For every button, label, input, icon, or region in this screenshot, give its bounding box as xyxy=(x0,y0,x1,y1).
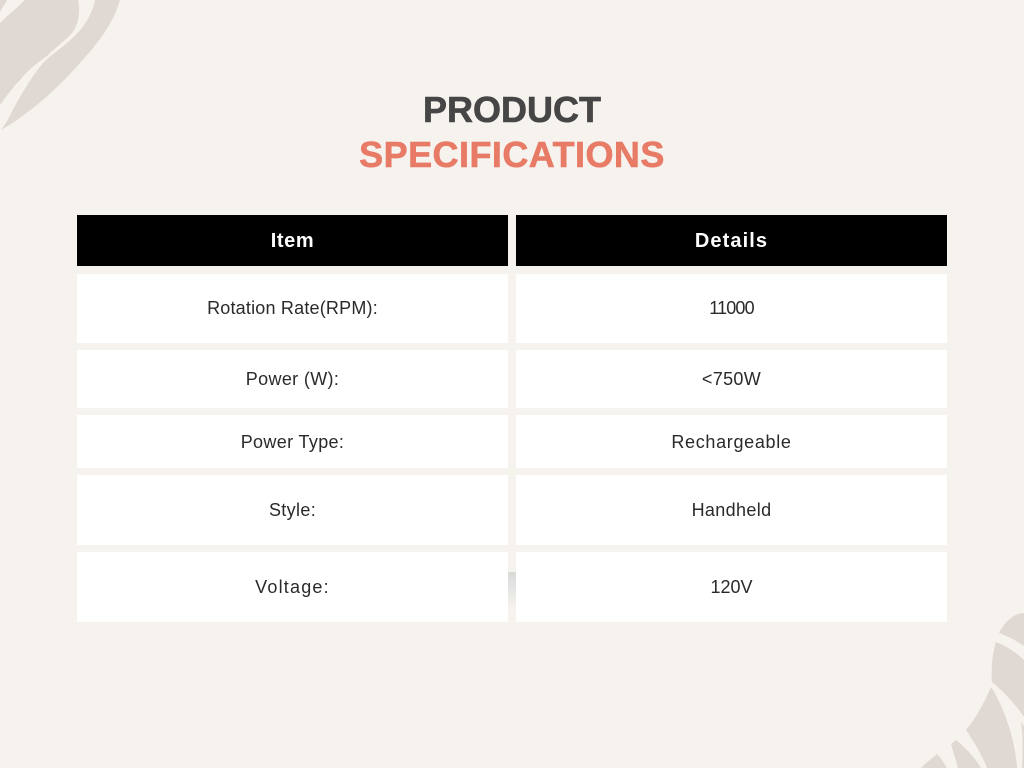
row label: power: Power (W): xyxy=(246,368,339,388)
title xyxy=(359,89,665,175)
row value: power type xyxy=(516,415,947,468)
row label: style xyxy=(77,475,508,545)
row value: style: Handheld xyxy=(692,500,771,520)
header: item: Item xyxy=(271,230,314,252)
row label: rotation rate xyxy=(77,274,508,343)
header: details: Details xyxy=(695,230,768,252)
header: details xyxy=(516,215,947,266)
row label: power type: Power Type: xyxy=(241,432,344,452)
row value: voltage xyxy=(516,552,947,622)
row value: power type: Rechargeable xyxy=(671,432,792,452)
decorative leaf: top left xyxy=(0,0,120,130)
title line: product: PRODUCT xyxy=(423,89,601,130)
row value: style xyxy=(516,475,947,545)
row label: rotation rate: Rotation Rate(RPM): xyxy=(207,298,378,318)
row label: voltage: Voltage: xyxy=(255,576,330,596)
row label: power xyxy=(77,350,508,408)
title line: specifications: SPECIFICATIONS xyxy=(359,134,665,175)
specifications table xyxy=(77,215,947,622)
row value: rotation rate: 11000 xyxy=(709,298,754,318)
row value: power xyxy=(516,350,947,408)
row label: power type xyxy=(77,415,508,468)
decorative leaf: bottom right xyxy=(921,613,1024,768)
row value: rotation rate xyxy=(516,274,947,343)
header: item xyxy=(77,215,508,266)
row label: voltage xyxy=(77,552,508,622)
grey smudge between voltage cells xyxy=(508,572,516,608)
row value: voltage: 120V xyxy=(710,576,753,596)
row label: style: Style: xyxy=(269,500,316,520)
row value: power: <750W xyxy=(702,368,761,388)
